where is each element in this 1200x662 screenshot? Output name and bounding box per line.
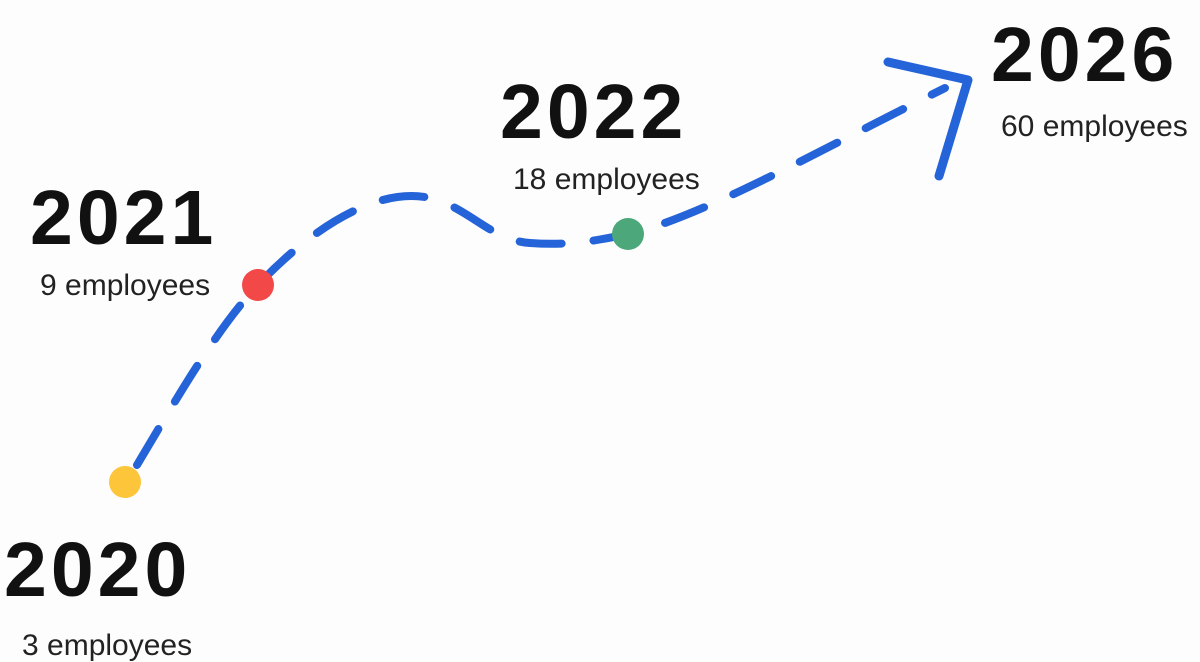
dot 2021 xyxy=(242,269,274,301)
year 2021: 2021 xyxy=(30,175,217,261)
arrowhead xyxy=(888,62,968,176)
dot 2022 xyxy=(612,218,644,250)
year 2026: 2026 xyxy=(991,12,1178,98)
label 2020 xyxy=(4,527,192,662)
label 2022 xyxy=(500,69,700,196)
dot 2020 xyxy=(109,466,141,498)
count 2021: 9 employees xyxy=(40,269,210,302)
count 2022: 18 employees xyxy=(513,163,700,196)
year 2020: 2020 xyxy=(4,527,191,613)
label 2021 xyxy=(30,175,217,302)
count 2020: 3 employees xyxy=(22,629,192,662)
year 2022: 2022 xyxy=(500,69,687,155)
label 2026 xyxy=(991,12,1188,143)
count 2026: 60 employees xyxy=(1001,110,1188,143)
dashed growth line xyxy=(137,88,945,465)
